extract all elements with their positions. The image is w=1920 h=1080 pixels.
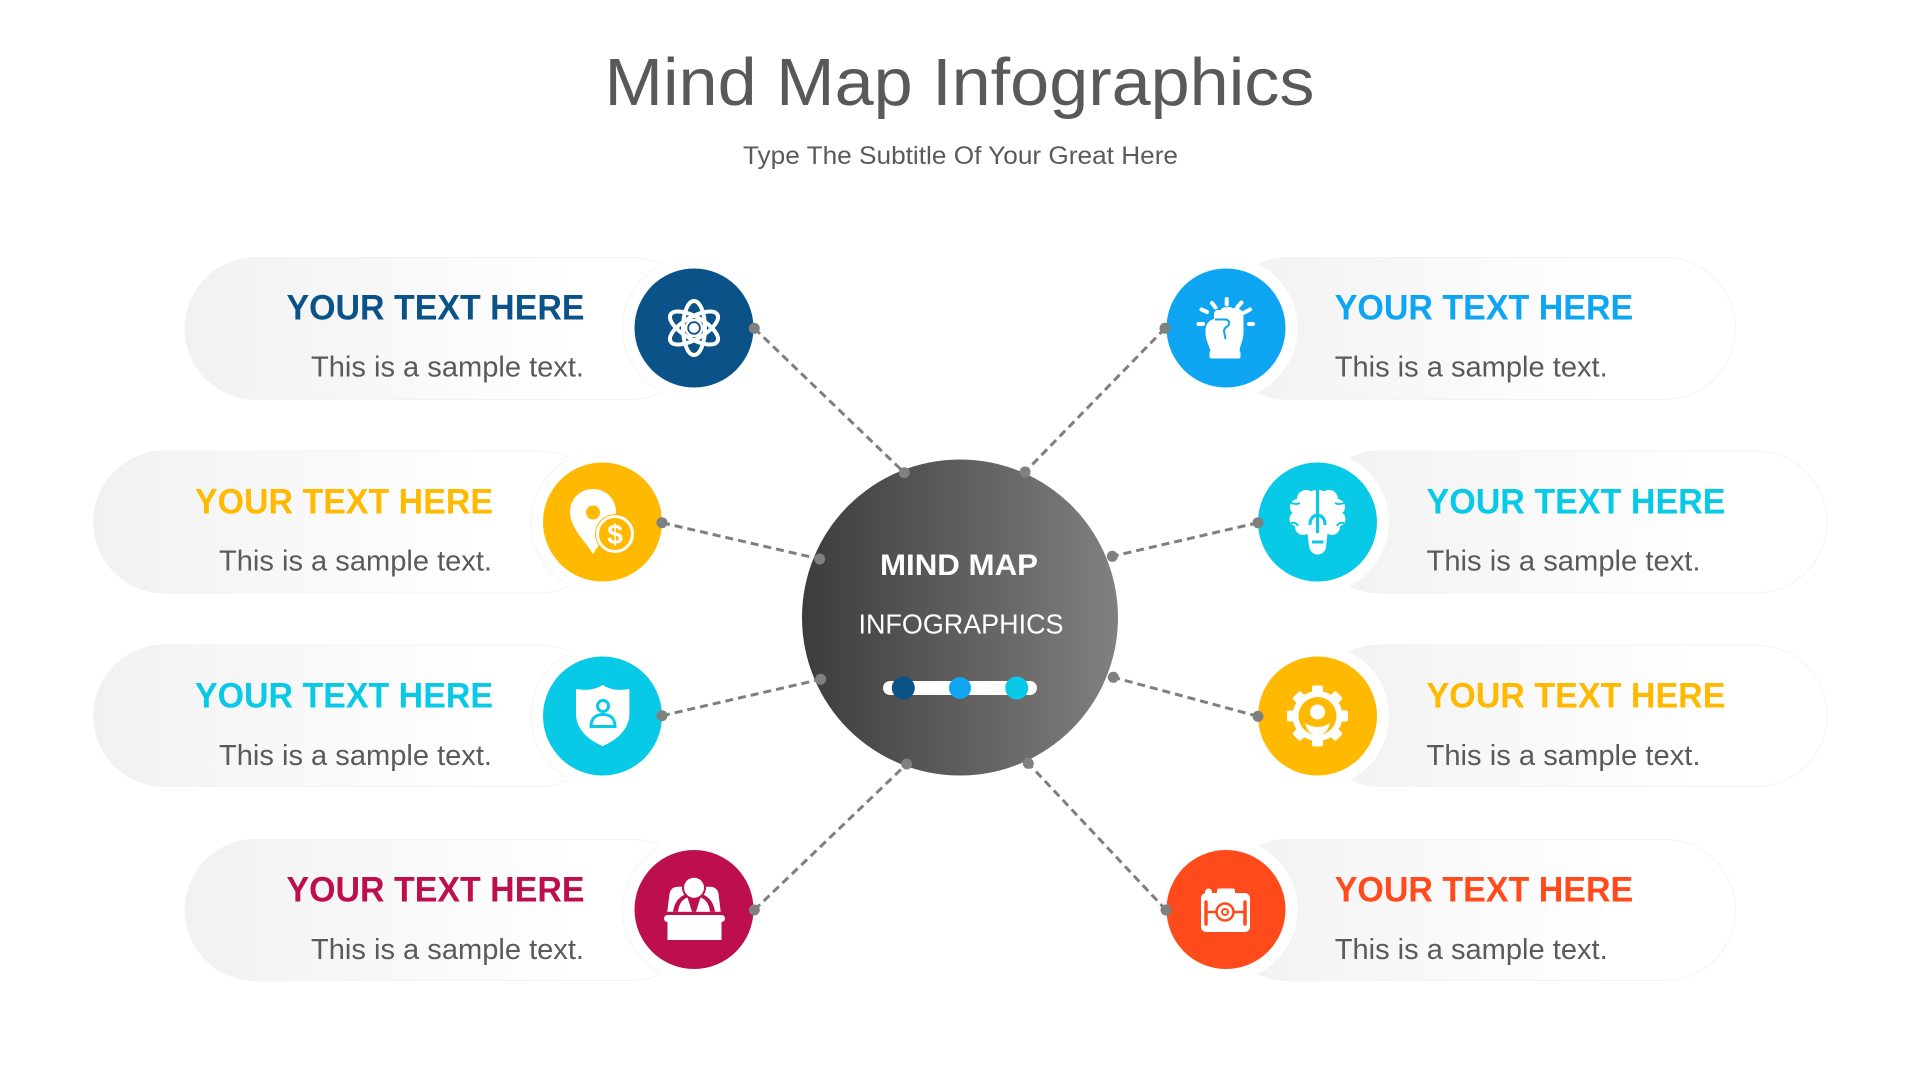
center heading: MIND MAP [880,549,1038,582]
panel: bottom left item [185,838,766,981]
icon circle: cyan [1258,462,1377,582]
icon circle: cyan [543,656,662,776]
center subheading: INFOGRAPHICS [858,608,1064,639]
panel: top left item [185,256,766,400]
pill background [1310,645,1827,786]
icon: gear with person [1287,686,1348,746]
body text: This is a sample text. [1335,934,1608,966]
connector end dots [656,323,1264,916]
body text: This is a sample text. [311,934,584,966]
icon circle: crimson [634,850,754,969]
icon: raised fist [1198,299,1253,358]
icon: camera [1201,888,1250,932]
body text: This is a sample text. [219,546,492,578]
slider decoration [883,676,1037,700]
body text: This is a sample text. [1426,740,1700,772]
icon: location pin with dollar [570,489,635,554]
title: Mind Map Infographics [604,45,1314,120]
icon ring [622,838,766,981]
subtitle: Type The Subtitle Of Your Great Here [743,142,1178,170]
panel: bottom right item [1154,838,1736,981]
icon: speaker at podium [664,876,725,940]
body text: This is a sample text. [1335,352,1608,384]
icon: location pin with dollar: $ [607,519,623,550]
icon ring [1246,450,1389,594]
connector lines [662,328,1258,910]
icon ring [531,644,674,788]
panel: second right item [1246,450,1827,594]
icon: shield with person [576,685,629,746]
icon: atom [665,301,723,355]
heading: YOUR TEXT HERE [286,288,584,328]
icon ring [531,450,674,594]
icon ring [1154,256,1298,400]
heading: YOUR TEXT HERE [1335,870,1633,910]
body text: This is a sample text. [1426,546,1700,578]
panel: second left item [94,450,674,594]
heading: YOUR TEXT HERE [1426,482,1726,522]
pill background [1218,258,1736,400]
icon ring [1246,644,1389,788]
icon ring [622,256,766,400]
heading: YOUR TEXT HERE [1335,288,1633,328]
pill background [94,451,610,593]
icon circle: navy [634,268,754,388]
pill background [1218,840,1736,980]
icon circle: amber [543,462,662,582]
heading: YOUR TEXT HERE [195,482,493,522]
icon circle: orange red [1166,850,1286,969]
heading: YOUR TEXT HERE [195,676,493,716]
body text: This is a sample text. [311,352,584,384]
panel: third right item [1246,644,1827,788]
pill background [185,840,702,980]
heading: YOUR TEXT HERE [286,870,584,910]
heading: YOUR TEXT HERE [1426,676,1726,716]
pill background [94,645,610,786]
panel: third left item [94,644,674,788]
icon circle: sky blue [1166,268,1286,388]
icon ring [1154,838,1298,981]
center circle [802,460,1118,776]
panel: top right item [1154,256,1736,400]
icon circle: amber [1258,656,1377,776]
body text: This is a sample text. [219,740,492,772]
pill background [1310,451,1827,593]
pill background [185,258,702,400]
icon: brain light bulb [1290,490,1346,554]
